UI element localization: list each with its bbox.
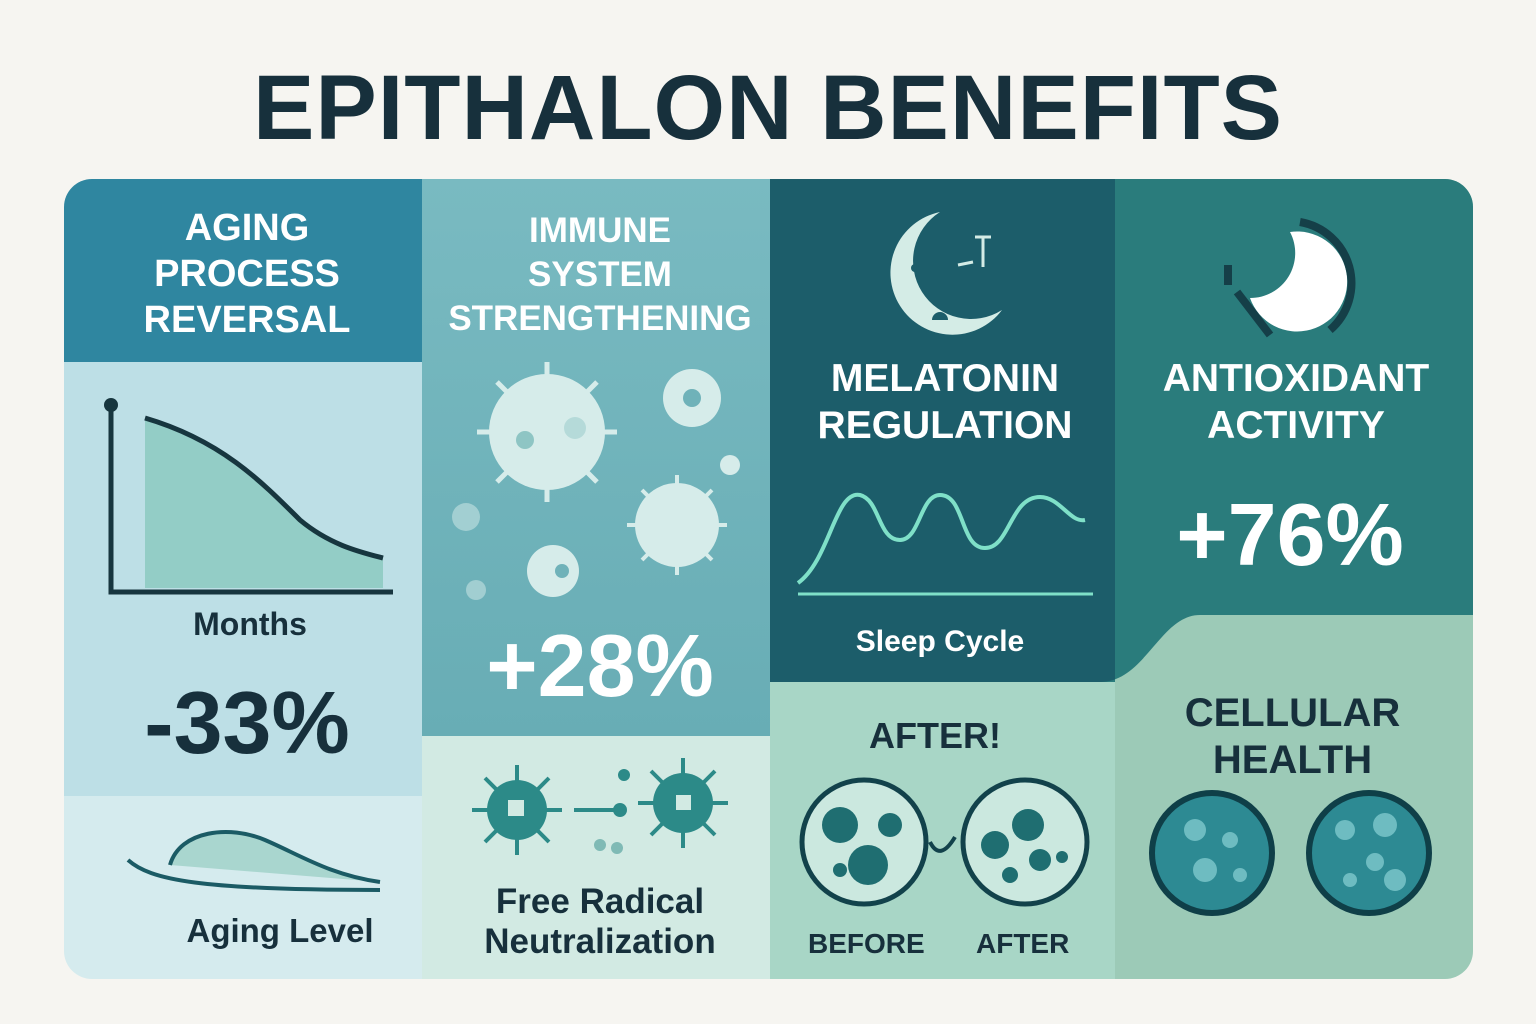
aging chart: [104, 398, 393, 592]
heading: immune: [448, 211, 752, 338]
stat: -33%: -33%: [144, 673, 350, 772]
heading: antioxidant: ANTIOXIDANT: [1163, 357, 1429, 400]
main panel: [64, 179, 1473, 979]
label: aging level: Aging Level: [186, 912, 374, 949]
heading: melatonin: REGULATION: [818, 404, 1072, 447]
stat: +28%: +28%: [486, 616, 714, 715]
heading: aging: PROCESS: [154, 253, 340, 295]
labels: before / after: BEFORE: [808, 928, 925, 959]
heading: immune: SYSTEM: [528, 255, 672, 294]
title: EPITHALON BENEFITS: [253, 57, 1283, 159]
heading: immune: STRENGTHENING: [448, 299, 752, 338]
icon: moon sleep: [890, 212, 1002, 335]
icon: antioxidant moon: [1228, 222, 1351, 335]
label: months: Months: [193, 606, 307, 642]
label: sleep cycle: Sleep Cycle: [856, 625, 1024, 658]
heading: aging: REVERSAL: [144, 299, 350, 341]
heading: antioxidant: ACTIVITY: [1207, 404, 1385, 447]
heading: melatonin: MELATONIN: [831, 357, 1059, 400]
label: free radical: Free Radical: [496, 882, 704, 921]
heading: immune: IMMUNE: [529, 211, 671, 250]
heading: cellular health: [1185, 691, 1400, 782]
heading: antioxidant: [1163, 357, 1429, 447]
heading: cellular health: HEALTH: [1213, 738, 1372, 782]
icon: immune cells: [452, 362, 740, 600]
labels: before / after: AFTER: [976, 928, 1069, 959]
aging level curve: [128, 832, 380, 890]
heading: cellular health: CELLULAR: [1185, 691, 1400, 735]
wave chart: [798, 495, 1093, 594]
before/after cells: [802, 780, 1087, 904]
label: free radical: Neutralization: [484, 922, 716, 961]
stat: +76%: +76%: [1176, 485, 1404, 584]
label: free radical: [484, 882, 716, 961]
heading: aging: AGING: [185, 207, 309, 249]
label: after: AFTER!: [869, 715, 1001, 756]
heading: melatonin: [818, 357, 1072, 447]
cellular health cells: [1152, 793, 1429, 913]
heading: aging: [144, 207, 350, 341]
icon: free radicals: [472, 758, 728, 855]
labels: before / after: [808, 928, 1069, 959]
